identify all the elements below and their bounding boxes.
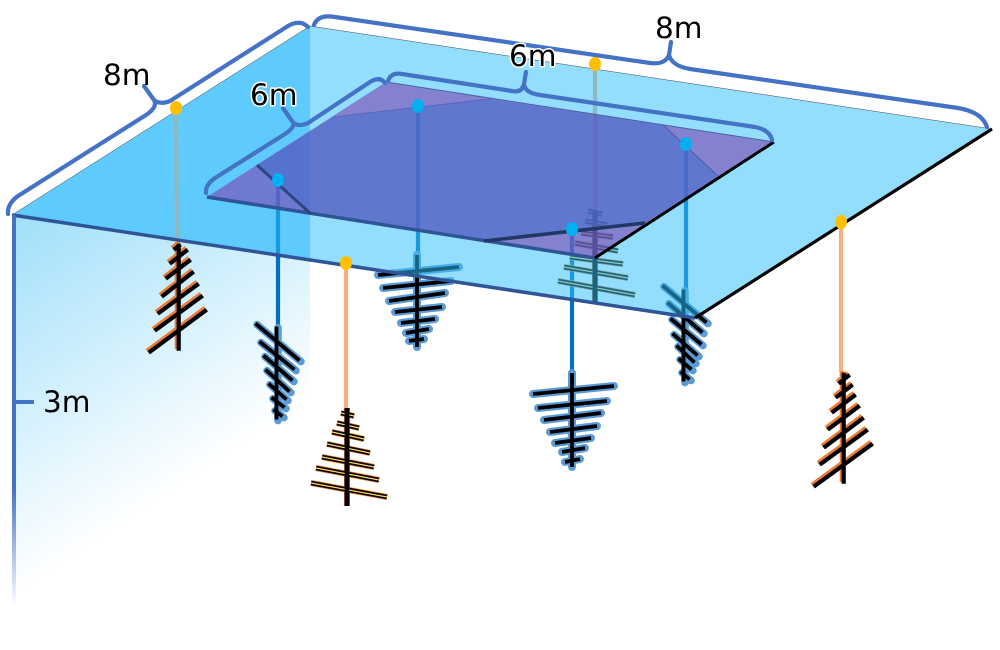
label: 8m left: 8m: [103, 58, 151, 92]
antenna tree: orange right: [812, 371, 873, 487]
dot: blue front: [566, 222, 578, 236]
dot: blue right: [680, 137, 692, 151]
plane underlay: left brighter section: [12, 26, 310, 260]
antenna tree: orange front: [311, 408, 387, 506]
plane and square edge lines: [12, 82, 992, 318]
antenna tree: blue left: [256, 324, 301, 421]
bracket: inner left 6m: [206, 79, 385, 193]
antenna tree: orange back: [558, 210, 635, 302]
height edge line: [12, 215, 16, 606]
label: 6m left: 6m: [250, 78, 298, 112]
pole: blue left: [276, 181, 280, 328]
pole: orange left: [176, 108, 177, 240]
antenna tree: blue front: [533, 373, 614, 467]
pole: blue front: [570, 229, 574, 375]
dot: blue centre: [412, 99, 424, 113]
dot: yellow front: [340, 256, 352, 270]
inner square panel: [207, 82, 774, 258]
bracket: outer top 8m: [314, 16, 987, 127]
back wall with gradient: [12, 215, 310, 640]
dot: yellow right: [835, 215, 847, 229]
bracket: outer left 8m: [8, 23, 308, 214]
bracket: inner top 6m: [388, 72, 772, 140]
antenna tree: blue centre: [378, 255, 459, 347]
dot: yellow back: [589, 57, 601, 71]
pole: blue centre: [416, 106, 420, 256]
label: 6m top: 6m: [509, 39, 557, 73]
translucent ceiling plane: [12, 26, 992, 318]
pole: orange front: [344, 263, 348, 410]
pole: orange back: [593, 64, 597, 210]
label: 8m top: 8m: [655, 11, 703, 45]
dot: blue left: [272, 173, 284, 187]
antenna tree: blue right: [662, 286, 708, 383]
pole: orange right: [839, 222, 843, 372]
dot: yellow left: [170, 101, 182, 115]
octagon coverage area: [257, 99, 718, 241]
pole: blue right: [684, 144, 688, 292]
height tick: [14, 400, 34, 404]
label: 3m height: 3m: [43, 385, 91, 419]
antenna tree: orange left: [147, 242, 207, 353]
